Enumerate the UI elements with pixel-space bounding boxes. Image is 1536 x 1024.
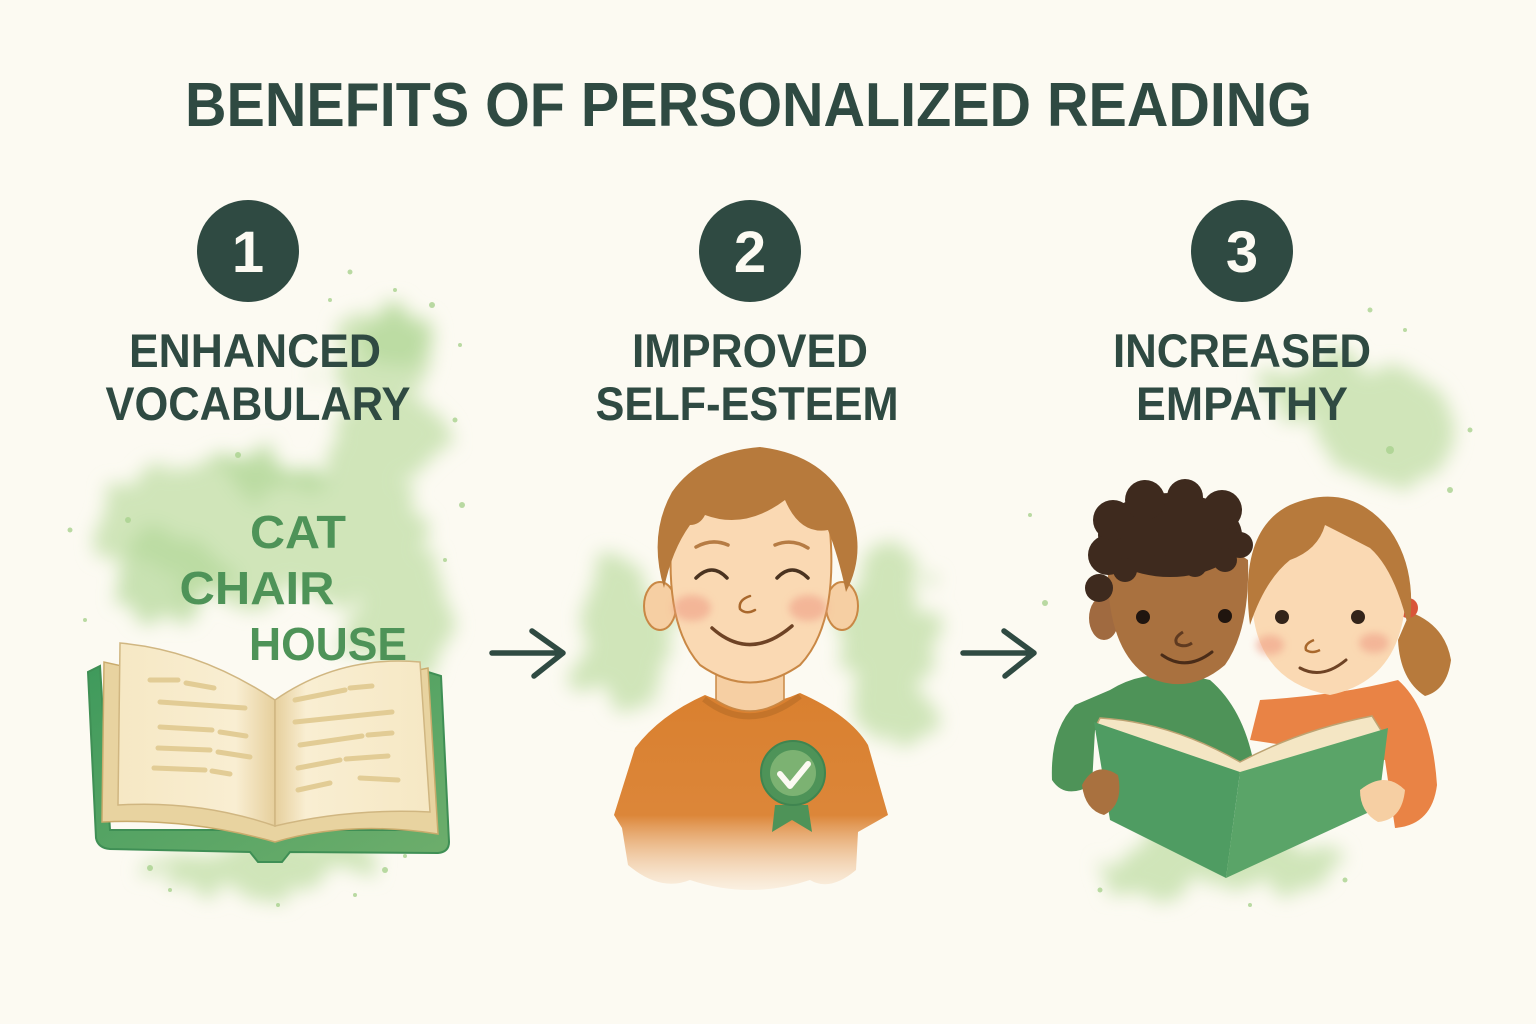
arrow 2 <box>963 631 1034 676</box>
number badge 3 <box>1191 200 1293 302</box>
hands <box>1082 769 1405 822</box>
heading: increased empathy: EMPATHY <box>1136 377 1348 430</box>
vocabulary words: CAT <box>250 506 346 558</box>
heading: enhanced vocabulary: ENHANCED <box>129 324 381 377</box>
title: BENEFITS OF PERSONALIZED READING <box>185 71 1312 140</box>
vocabulary words: CHAIR <box>180 562 334 614</box>
vocabulary words <box>180 506 407 670</box>
heading: increased empathy <box>1113 324 1371 430</box>
illustration: girl <box>1248 497 1451 828</box>
orange shirt <box>614 693 888 890</box>
number badge 2 <box>699 200 801 302</box>
nose and smile <box>740 596 755 612</box>
icon: open book <box>88 643 449 862</box>
heading: enhanced vocabulary: VOCABULARY <box>106 377 410 430</box>
panel: increased empathy <box>1028 200 1472 907</box>
hair <box>1248 497 1411 630</box>
pigtail <box>1398 612 1451 696</box>
body <box>1052 674 1255 791</box>
icon: ribbon badge with check <box>761 741 825 832</box>
panel: enhanced vocabulary <box>68 200 465 907</box>
hair <box>658 447 858 592</box>
face <box>671 490 831 682</box>
face <box>1108 535 1248 684</box>
curly hair <box>1085 479 1253 602</box>
heading: improved self-esteem: SELF-ESTEEM <box>596 377 898 430</box>
collar and neck <box>716 670 784 711</box>
illustration: boy with curly hair <box>1052 479 1255 791</box>
eyebrows <box>696 542 808 548</box>
heading: increased empathy: INCREASED <box>1113 324 1371 377</box>
heading: enhanced vocabulary <box>106 324 410 430</box>
face <box>1252 510 1406 695</box>
number badge 1: 1 <box>232 220 264 285</box>
closed smiling eyes <box>696 570 808 578</box>
face details <box>1136 610 1150 624</box>
face details <box>1275 610 1289 624</box>
number badge 1 <box>197 200 299 302</box>
icon: shared green book <box>1094 716 1388 878</box>
body <box>1250 680 1437 828</box>
heading: improved self-esteem <box>596 324 898 430</box>
splatter: empathy <box>1028 308 1472 907</box>
watercolor washes <box>95 308 1453 895</box>
text lines on pages <box>150 680 398 790</box>
heading: improved self-esteem: IMPROVED <box>632 324 868 377</box>
number badge 3: 3 <box>1226 220 1258 285</box>
vocabulary words: HOUSE <box>249 618 407 670</box>
panel: improved self-esteem <box>596 200 898 890</box>
illustration: smiling boy <box>614 447 888 890</box>
number badge 2: 2 <box>734 220 766 285</box>
arrow 1 <box>492 631 563 676</box>
ears <box>644 582 676 630</box>
ear <box>1089 596 1119 640</box>
splatter: vocabulary <box>68 270 465 907</box>
cheeks <box>673 595 827 621</box>
